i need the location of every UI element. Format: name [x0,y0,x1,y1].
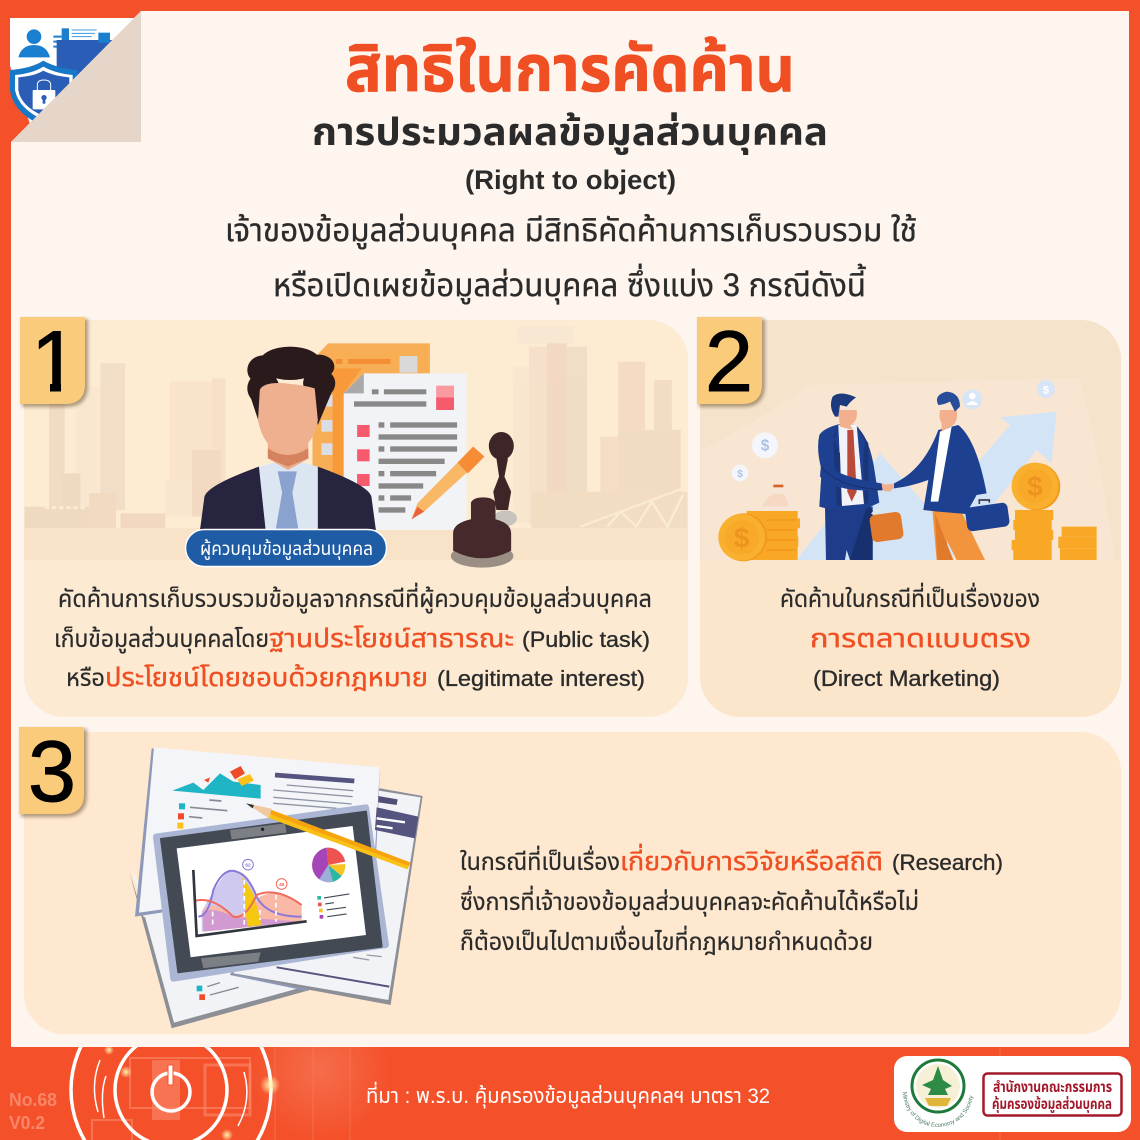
pie chart [312,848,345,882]
handshake illustration: $ [1027,471,1043,502]
right man [932,502,985,560]
handshake illustration: $ [734,522,750,553]
panel 3: research [24,732,1121,1034]
panel 1 text: ฐานประโยชน์สาธารณะ [269,623,514,653]
panel 1 text: (Legitimate interest) [437,666,645,691]
handshake illustration: $ [761,438,770,455]
panel 3 text: ก็ต้องเป็นไปตามเงื่อนไขที่กฎหมายกำหนดด้วย [460,925,873,956]
left coins [753,485,796,510]
intro text: หรือเปิดเผยข้อมูลส่วนบุคคล ซึ่งแบ่ง 3 กรณีดังนี้ [273,263,866,305]
panel 1: controller [24,320,688,717]
ministry seal [902,1058,974,1127]
city background [24,320,688,560]
chart: 62 [245,863,251,869]
badge 1: 1 [31,314,79,410]
handshake illustration: $ [1043,384,1050,396]
subtitle: การประมวลผลข้อมูลส่วนบุคคล [312,112,828,155]
controller label pill: ผู้ควบคุมข้อมูลส่วนบุคคล [200,537,373,561]
ministry seal: Ministry of Digital Economy and Society [902,1092,974,1127]
english subtitle: (Right to object) [465,165,676,195]
panel 3 text: ซึ่งการที่เจ้าของข้อมูลส่วนบุคคลจะคัดค้านได้หรือไม่ [460,885,919,917]
handshake illustration: $ [737,469,743,480]
badge 3: 3 [28,724,76,820]
stamp and pencil [412,432,517,568]
panel 3 text: ในกรณีที่เป็นเรื่อง [460,845,620,876]
panel 2: direct marketing [700,320,1121,717]
panel 1 text: หรือ [66,665,105,692]
handshake illustration [718,380,1097,561]
version label: No.68 [9,1090,57,1110]
panel 3 text: (Research) [892,850,1003,875]
panel 2 text: การตลาดแบบตรง [810,623,1031,653]
documents illustration [312,343,466,530]
corner icon: data protection shield [0,0,141,142]
footer decoration: power button [69,1047,1000,1140]
panel 2 text: (Direct Marketing) [813,666,1000,691]
title: สิทธิในการคัดค้าน [345,33,795,105]
tablet and papers illustration [129,747,423,1028]
panel 1 text: ประโยชน์โดยชอบด้วยกฎหมาย [105,662,428,692]
pencil [246,803,411,869]
panel 2 text [780,582,1040,691]
office name box: สำนักงานคณะกรรมการ [993,1079,1112,1096]
controller person [200,347,376,530]
logo box [894,1056,1131,1132]
intro text: เจ้าของข้อมูลส่วนบุคคล มีสิทธิคัดค้านการเก็บรวบรวม ใช้ [225,212,917,250]
chart [193,859,307,936]
panel 1 text: คัดค้านการเก็บรวบรวมข้อมูลจากกรณีที่ผู้ควบคุมข้อมูลส่วนบุคคล [58,582,652,614]
chart: 48 [279,882,285,888]
panel 1 text: เก็บข้อมูลส่วนบุคคลโดย [54,625,269,654]
controller label pill [186,530,386,566]
panel 1 text: (Public task) [522,627,650,652]
version label [9,1090,57,1133]
badge 2: 2 [705,314,753,410]
panel 3 text [460,843,1003,956]
source text: ที่มา : พ.ร.บ. คุ้มครองข้อมูลส่วนบุคคลฯ มาตรา 32 [366,1081,770,1109]
left man [825,507,873,560]
version label: V0.2 [9,1113,45,1133]
panel 1 text [54,582,652,692]
right coins [1012,510,1097,560]
intro text [225,212,917,305]
office name box [984,1074,1122,1116]
panel 3 text: เกี่ยวกับการวิจัยหรือสถิติ [620,843,883,876]
panel 2 text: คัดค้านในกรณีที่เป็นเรื่องของ [780,582,1040,613]
